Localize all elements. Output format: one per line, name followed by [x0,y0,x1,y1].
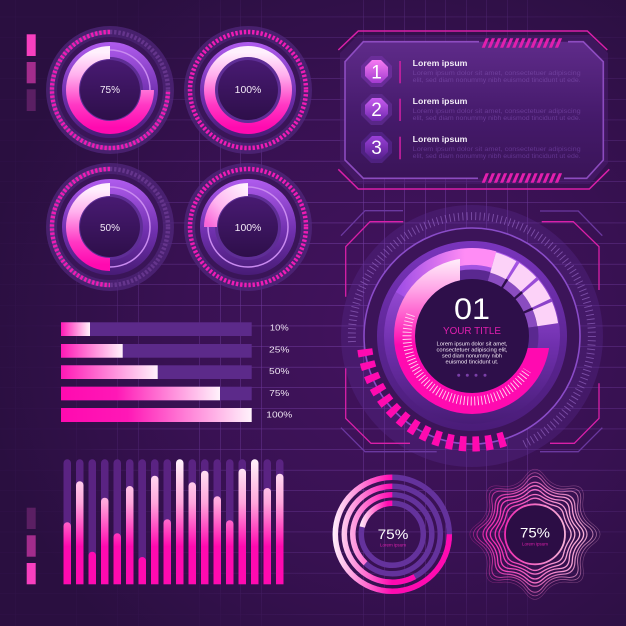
dial title number: 01 [454,293,490,326]
bar 50%: 50% [269,366,290,376]
dial description: euismod tincidunt ut. [446,360,498,366]
dial subtitle: YOUR TITLE [443,326,501,337]
wavy ring gauge [470,469,600,599]
dial description [436,342,508,366]
list item 3: Lorem ipsum dolor sit amet, consectetuer adipiscing [413,147,581,153]
dial dots [457,374,486,377]
bar 10% [61,322,289,336]
gauge 50% [46,163,174,291]
bar 25% [61,344,290,358]
stripes bottom [482,173,562,183]
list item 1: Lorem ipsum [413,59,467,68]
main dial [341,205,603,467]
list item 1: elit, sed diam nonummy nibh euismod tincidunt ut ede. [413,78,581,84]
bar 100%: 100% [266,409,293,419]
dial corner brackets [341,211,602,452]
bar 75%: 75% [269,388,290,398]
gauge 100% bottom [184,163,312,291]
list item 2: Lorem ipsum [413,97,467,106]
list item 2 [361,94,581,125]
dial description: consectetuer adipiscing elit, [436,348,508,354]
vertical bar chart [64,459,284,595]
panel: numbered list [338,31,609,189]
list item 1 [361,56,581,87]
bar 50% [61,365,290,379]
list item 2: 2 [371,100,382,121]
horizontal progress bars [61,322,293,422]
wavy gauge caption: Lorem ipsum [522,542,548,546]
list item 2: elit, sed diam nonummy nibh euismod tincidunt ut ede. [413,116,581,122]
list item 2: Lorem ipsum dolor sit amet, consectetuer adipiscing [413,109,581,115]
gauge 100% bottom: 100% [235,223,261,234]
concentric ring gauge [335,477,449,591]
gauge 100% top [184,26,312,154]
ring gauge value: 75% [378,526,408,542]
gauge 75%: 75% [100,85,120,96]
pale band [403,257,494,296]
list item 1: 1 [371,62,382,84]
list item 3 [361,132,581,163]
legend swatches bottom [27,508,36,584]
main pink arc [404,268,540,404]
stripes top [482,38,562,48]
bar 10%: 10% [270,323,289,333]
wavy gauge value: 75% [520,524,550,540]
segmented blocks [489,277,533,327]
list item 1: Lorem ipsum dolor sit amet, consectetuer adipiscing [413,71,581,77]
list item 3: 3 [371,138,382,159]
dial description: Lorem ipsum dolor sit amet, [436,342,508,348]
bar 100% [61,408,293,422]
list item 3: Lorem ipsum [413,135,467,144]
gauge 100% top: 100% [235,85,261,96]
gauge 75% [46,26,174,154]
outer pink blocks [365,349,505,444]
bar 75% [61,387,290,400]
bar 25%: 25% [269,345,290,355]
gauge 50%: 50% [100,223,120,234]
dial description: sed diam nonummy nibh [442,354,502,360]
legend swatches top [27,34,36,111]
list item 3: elit, sed diam nonummy nibh euismod tincidunt ut ede. [413,154,581,160]
ring gauge caption: Lorem ipsum [380,542,406,548]
arc ticks [407,315,527,401]
